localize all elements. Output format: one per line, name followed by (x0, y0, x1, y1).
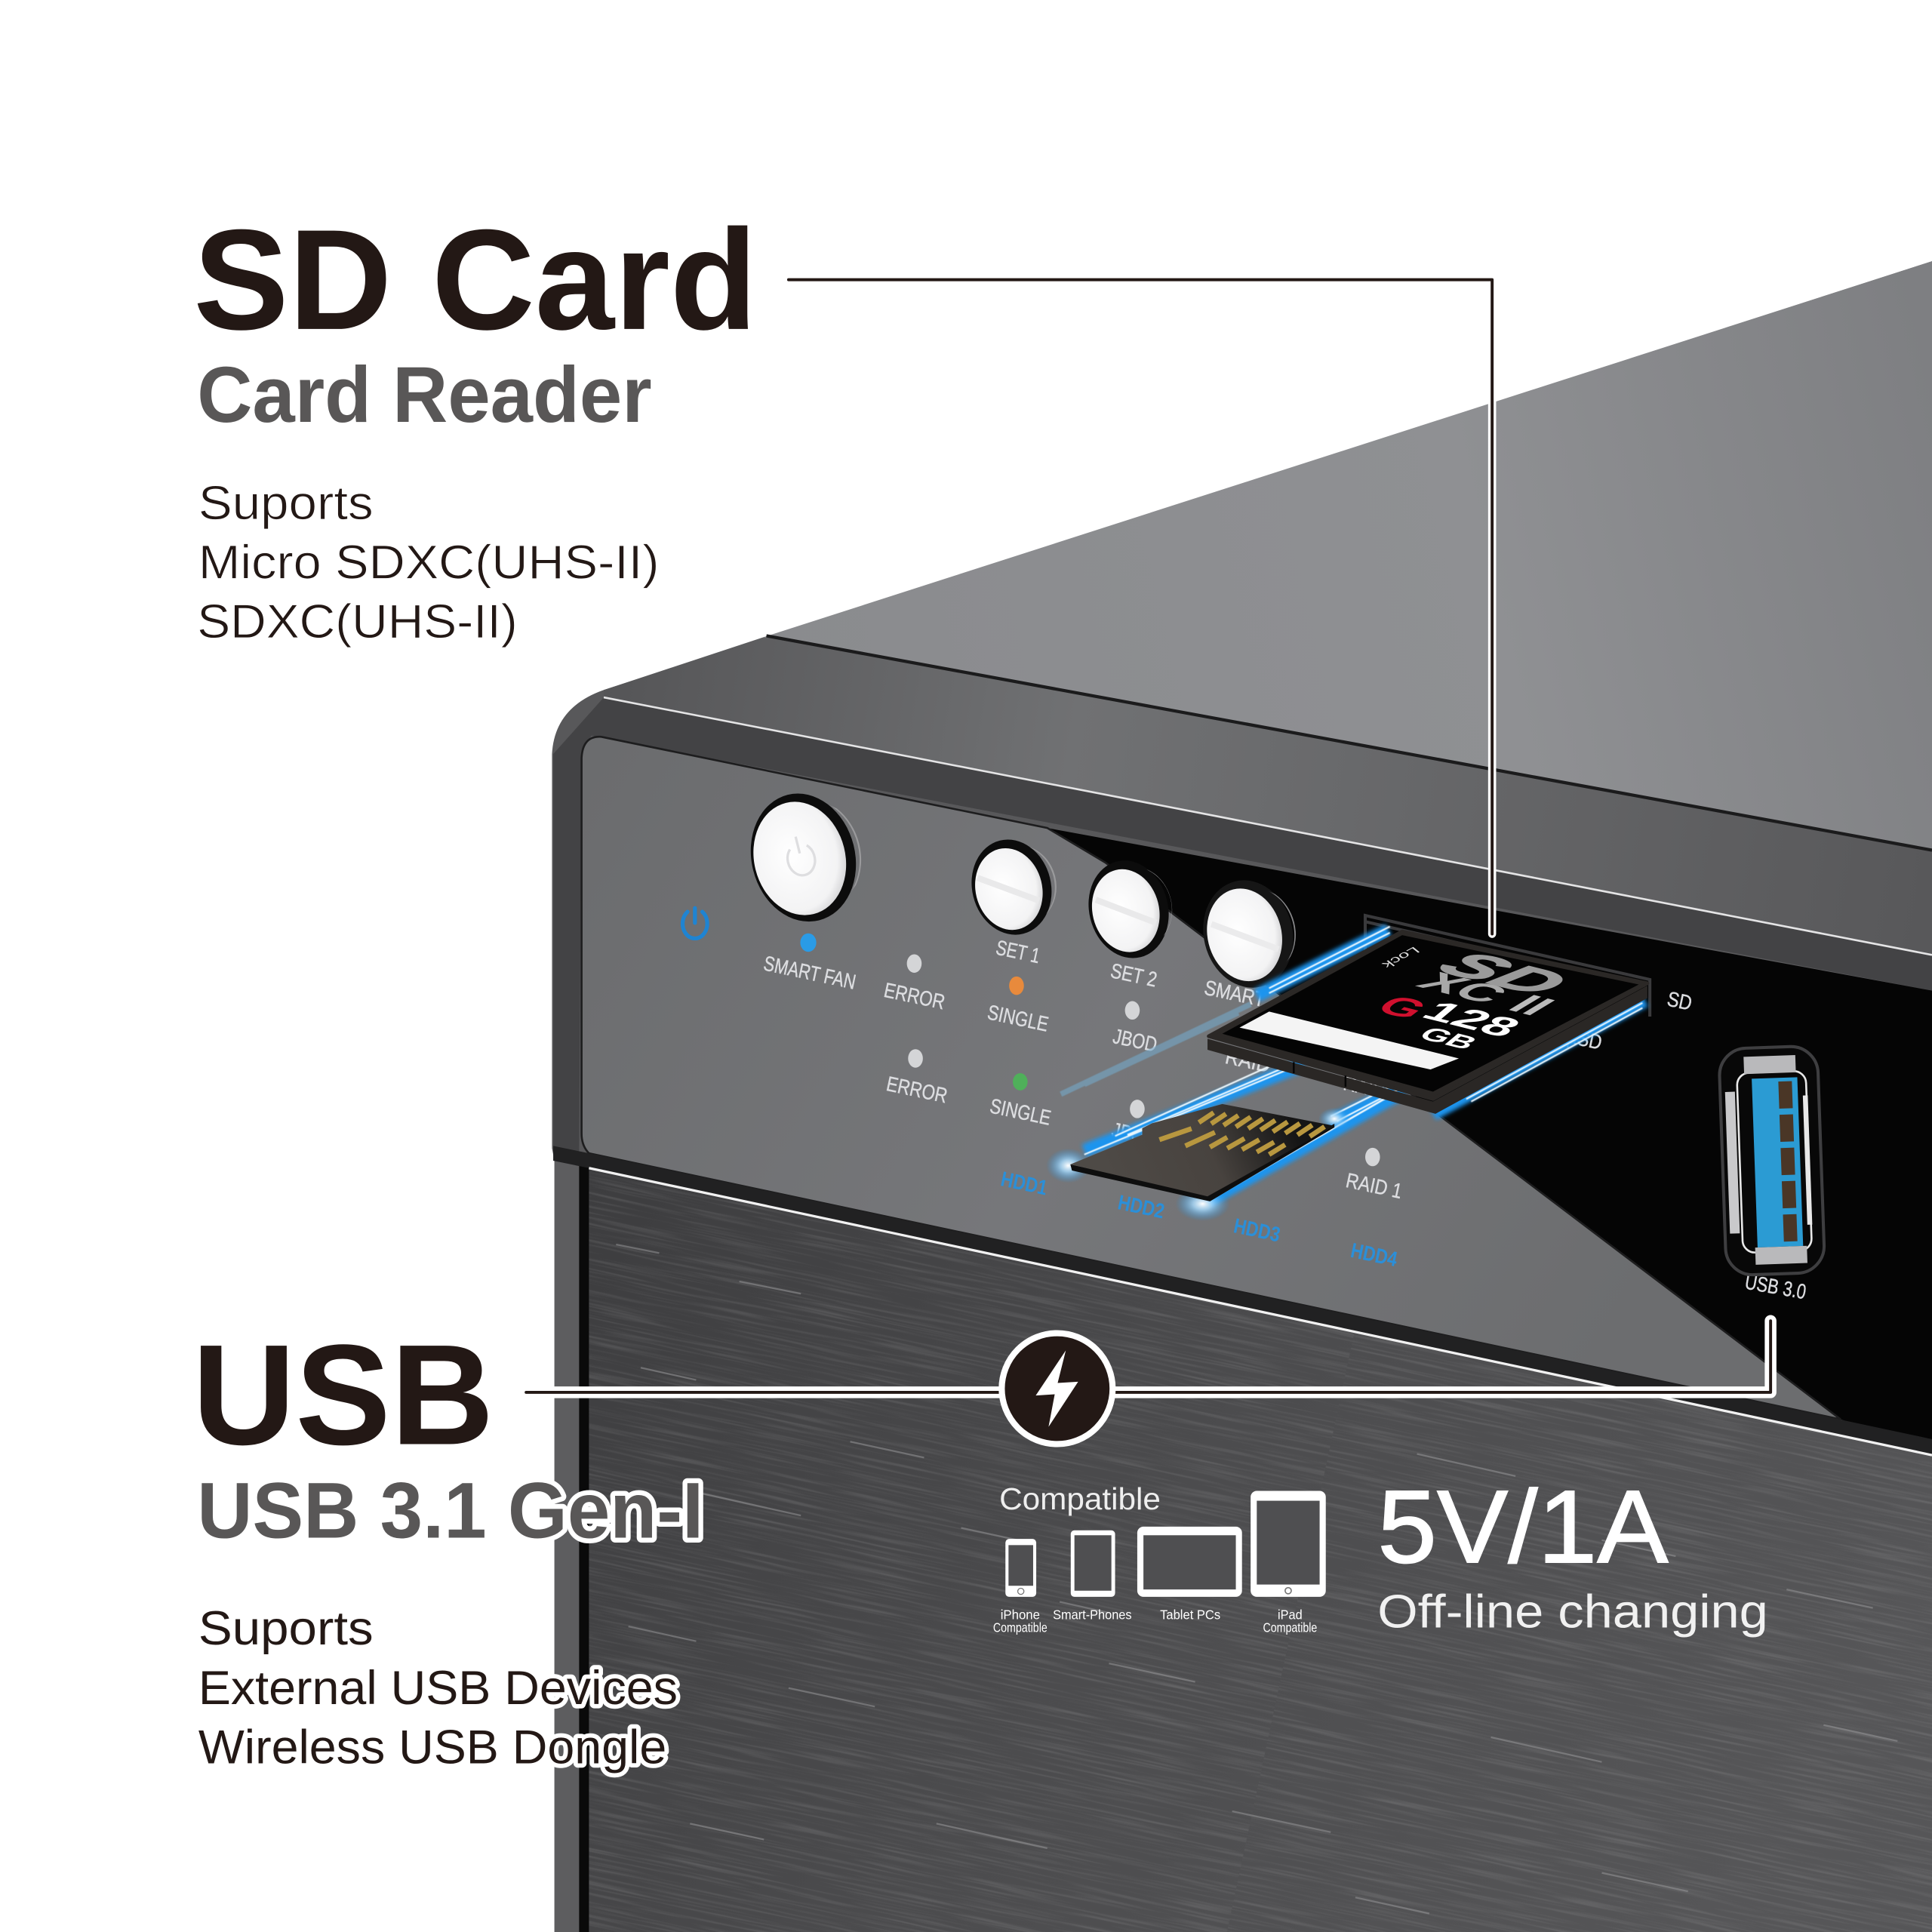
subheading: Card Reader: Card Reader (197, 351, 652, 439)
compatible devices (993, 1481, 1326, 1635)
G mark: G (1367, 990, 1437, 1025)
panel labels: JBOD (1109, 1118, 1158, 1150)
panel labels: SINGLE (988, 1094, 1053, 1130)
card face (1223, 935, 1638, 1092)
II mark: II (1497, 990, 1565, 1021)
spec: off-line charging: Off-line changing (1377, 1586, 1768, 1638)
side clip right (1803, 1095, 1812, 1225)
gold contacts bottom row (1159, 1129, 1285, 1155)
card rim (1209, 931, 1647, 1099)
card edge notches (1294, 1062, 1346, 1087)
panel labels: ERROR (882, 978, 947, 1014)
card slot (1365, 915, 1650, 1017)
capacity: 128 (1414, 995, 1530, 1043)
lower seam dark (553, 1146, 1932, 1455)
icon: power indicator (682, 908, 707, 938)
front bezel band (553, 697, 1932, 1152)
panel labels (761, 936, 1808, 1303)
power button (737, 781, 875, 933)
top face (764, 261, 1932, 851)
faint beam (1061, 1004, 1251, 1094)
SD logo: SD (1424, 945, 1583, 1002)
grey glass panel (582, 737, 1841, 1420)
bevel highlight (604, 697, 1932, 955)
USB 3.0 port (1718, 1046, 1825, 1275)
icon: tablet (1137, 1527, 1242, 1597)
panel labels: HDD3 (1232, 1214, 1282, 1247)
icon: smart phone (1071, 1531, 1115, 1597)
subheading: USB 3.1 Gen-I: USB 3.1 Gen-I (197, 1467, 703, 1555)
gold contacts top row (1199, 1112, 1324, 1137)
SD card (1208, 931, 1647, 1114)
control panel (682, 781, 1808, 1303)
beam core (1084, 927, 1642, 1198)
blue tongue (1752, 1077, 1803, 1247)
panel labels: SMART (1202, 976, 1267, 1011)
lower body streaks (616, 1244, 1897, 1914)
microSD body (1070, 1104, 1334, 1196)
set 2 button (1078, 851, 1183, 967)
device labels: iPhone (1001, 1607, 1040, 1622)
panel labels: ERROR (884, 1072, 949, 1107)
black glass panel (1048, 828, 1932, 1447)
port opening outline (1737, 1071, 1812, 1253)
top bevel strip (604, 637, 1932, 955)
callout line: USB (526, 1321, 1770, 1392)
icon: lightning badge (1001, 1334, 1112, 1444)
text block: USB support: Suports (198, 1602, 374, 1655)
heading: USB: USB (192, 1315, 494, 1475)
lower left side strip (555, 1155, 579, 1932)
bottom clip (1755, 1246, 1807, 1265)
set 1 button (961, 829, 1067, 943)
text block: SD support: SDXC(UHS-II) (197, 595, 518, 648)
lock text: Lock (1378, 944, 1423, 971)
panel labels: HDD4 (1349, 1238, 1400, 1271)
panel labels: SINGLE (986, 1000, 1051, 1036)
text block: USB support (198, 1602, 678, 1774)
label: compatible: Compatible (999, 1481, 1161, 1516)
panel labels: SET 1 (994, 936, 1042, 968)
text block: SD support: Micro SDXC(UHS-II) (198, 537, 659, 589)
text block: SD support: Suports (198, 477, 374, 530)
top clip (1743, 1055, 1796, 1074)
icon: iPhone (1005, 1539, 1036, 1597)
XC mark: XC (1407, 967, 1519, 1008)
beam glow (1084, 931, 1645, 1201)
device labels: Compatible (1263, 1620, 1317, 1635)
port frame (1718, 1046, 1825, 1275)
spec: 5V/1A: 5V/1A (1377, 1469, 1669, 1585)
device labels: Compatible (993, 1620, 1048, 1635)
text block: USB support: Wireless USB Dongle (198, 1721, 666, 1774)
capacity unit: GB (1412, 1023, 1484, 1054)
panel labels: SD (1665, 987, 1694, 1015)
card edge (1208, 986, 1647, 1114)
light flares (1046, 1108, 1350, 1221)
dark seam on left (579, 1155, 589, 1932)
heading: SD Card: SD Card (193, 201, 757, 360)
text block: SD support (197, 477, 659, 648)
panel labels: RAID 1 (1223, 1044, 1288, 1080)
side clip left (1725, 1092, 1740, 1234)
microSD edge (1070, 1124, 1334, 1201)
brushed texture (589, 1168, 1932, 1932)
device labels: Smart-Phones (1053, 1607, 1132, 1622)
enclosure silhouette (552, 261, 1932, 1932)
light beams (1046, 927, 1645, 1221)
text block: USB support: External USB Devices (198, 1662, 678, 1715)
microSD card (1070, 1104, 1334, 1201)
panel labels: HDD1 (999, 1167, 1050, 1199)
product: NAS enclosure (552, 261, 1932, 1932)
seam line on top (767, 635, 1932, 851)
panel labels: HDD2 (1116, 1190, 1167, 1223)
panel labels: SET 2 (1109, 958, 1159, 992)
callout line: SD card (789, 280, 1492, 934)
smart button (1192, 870, 1307, 997)
panel labels: JBOD (1111, 1024, 1159, 1057)
lower seam highlight (589, 1168, 1932, 1455)
LED indicators (800, 934, 1380, 1166)
device labels (993, 1607, 1317, 1635)
panel labels: RAID 1 (1342, 1071, 1401, 1106)
panel labels: SMART FAN (761, 952, 858, 994)
white label strip (1239, 1011, 1459, 1069)
card printing (1367, 944, 1583, 1054)
icon: iPad (1251, 1491, 1326, 1597)
contacts (1785, 1081, 1791, 1241)
panel labels: RAID 1 (1344, 1168, 1404, 1203)
device labels: iPad (1278, 1607, 1303, 1622)
panel labels: USB 3.0 (1743, 1270, 1808, 1303)
device labels: Tablet PCs (1160, 1607, 1220, 1622)
lower body brushed metal (589, 1168, 1932, 1932)
panel labels: µSD (1565, 1024, 1604, 1054)
